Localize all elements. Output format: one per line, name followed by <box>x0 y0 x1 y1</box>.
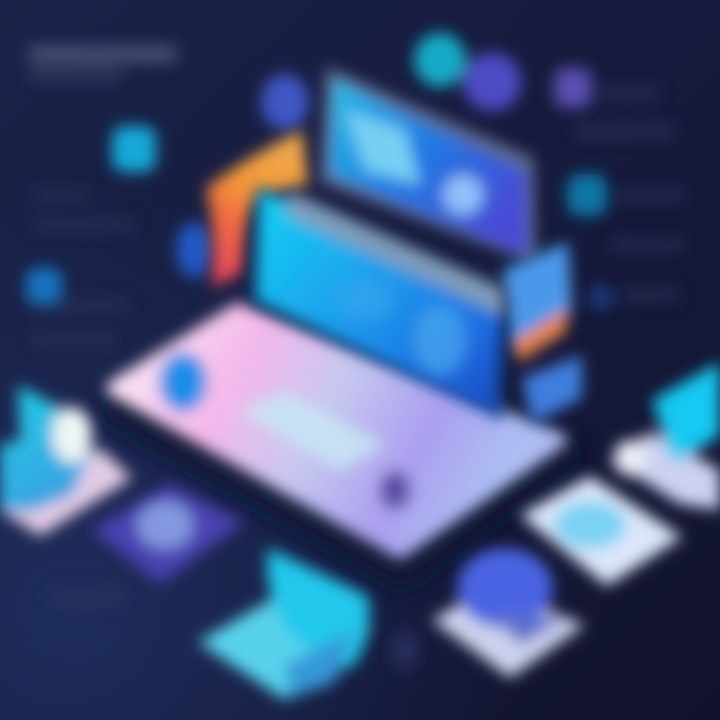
icon: blue square left <box>26 268 62 304</box>
icon: faint blue square right <box>590 285 612 309</box>
blurred side notes: left <box>30 190 135 604</box>
blurred heading text area <box>28 46 178 80</box>
laptop base <box>113 310 560 552</box>
icon: blue circle on base <box>159 352 207 412</box>
icon: blue circle top left <box>261 74 309 130</box>
device: cyan laptop bottom centre <box>198 548 372 700</box>
small dim mark bottom centre <box>392 630 418 670</box>
floating squares <box>26 33 612 309</box>
device: dark tablet bottom left <box>92 484 244 584</box>
device: small laptop bottom left <box>0 385 132 536</box>
icon: purple dot on base <box>379 470 411 510</box>
device: blue dome on white tablet <box>432 548 585 678</box>
icon: blue circle left <box>176 222 212 278</box>
right side cards <box>503 242 582 424</box>
icon: teal tile top <box>414 33 466 87</box>
back screen <box>320 66 536 264</box>
icon: indigo tile top <box>463 53 521 111</box>
icon: teal square right <box>567 174 607 216</box>
laptop base shadow <box>90 340 590 590</box>
device: laptop far right <box>610 362 720 510</box>
icon: purple square right <box>554 68 592 108</box>
front screen <box>252 186 507 420</box>
icon: orange folder left <box>206 130 308 288</box>
device: pale tablet right <box>520 476 682 586</box>
blurred side notes: right <box>575 88 685 300</box>
icon: teal square left top <box>112 126 156 172</box>
trackpad area <box>240 392 385 470</box>
